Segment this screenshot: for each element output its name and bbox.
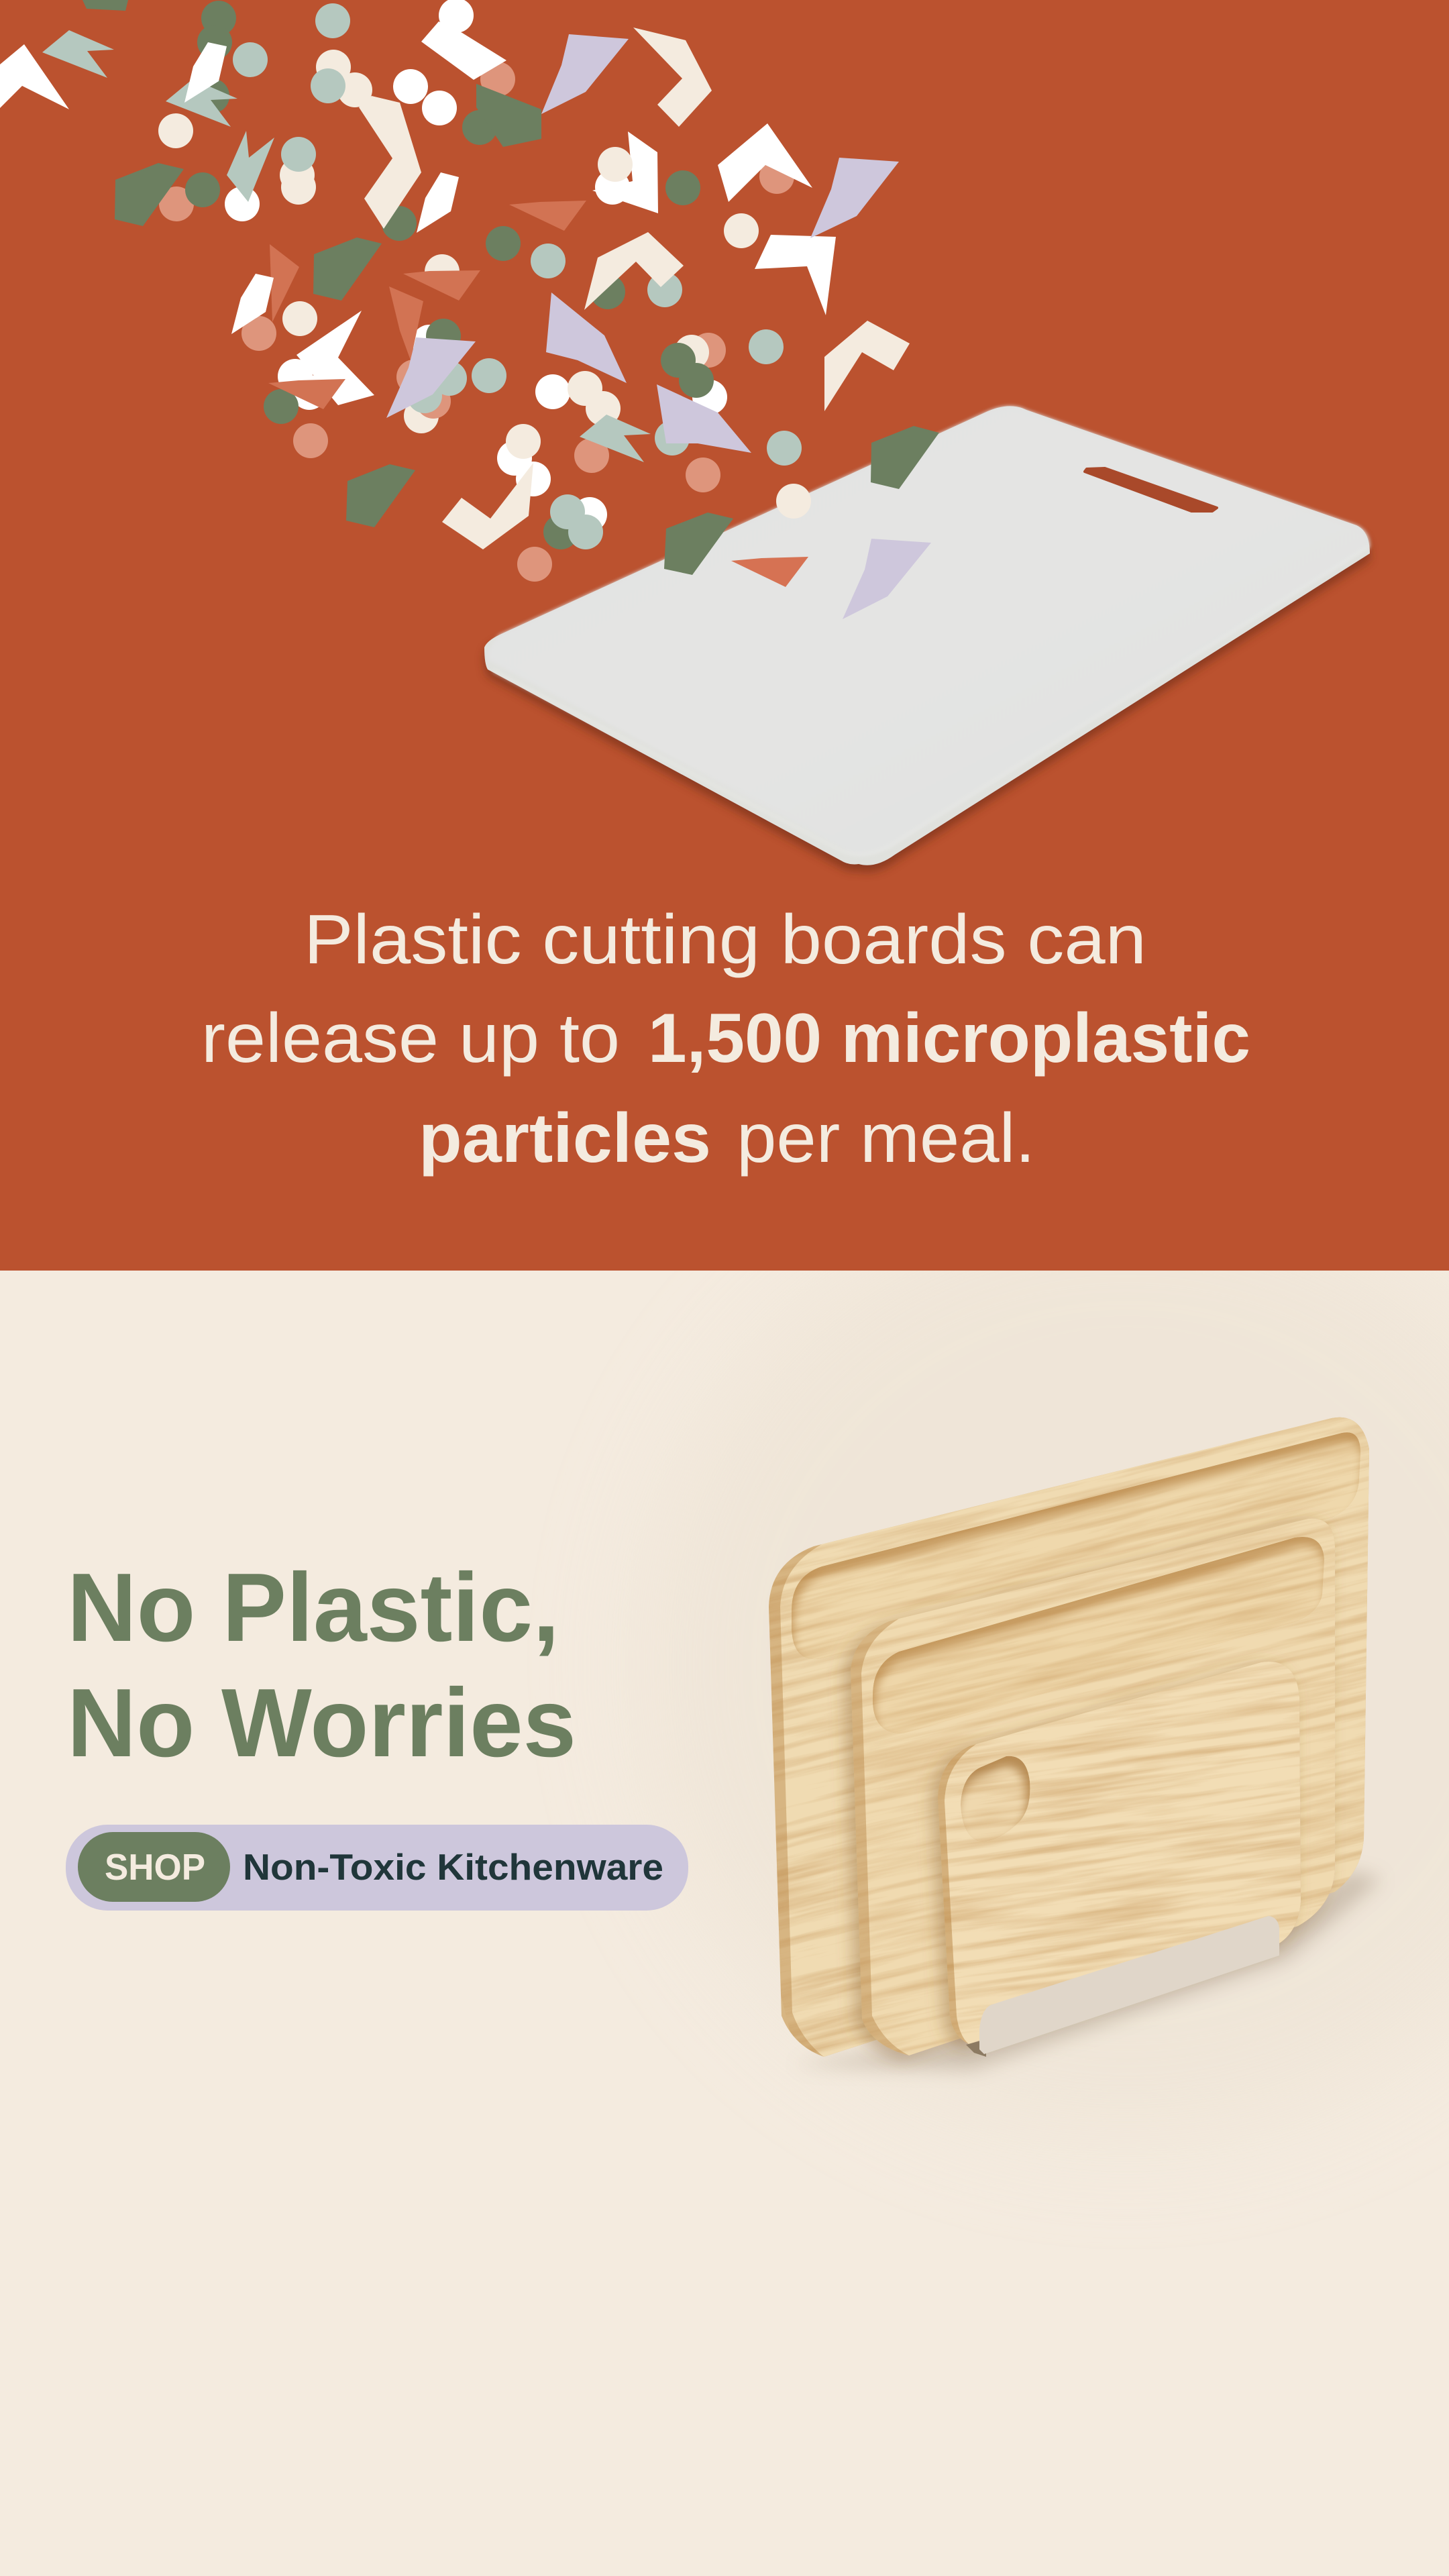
- board stand: [966, 1916, 1279, 2057]
- panel: no plastic call to action: [66, 1417, 1391, 2082]
- statistic text: per meal.: [737, 1099, 1035, 1177]
- statistic text: release up to: [201, 1000, 620, 1077]
- shop button: Non-Toxic Kitchenware: [243, 1846, 663, 1888]
- particle circles: [158, 0, 811, 582]
- statistic text: [201, 901, 1250, 1177]
- heading: [67, 1553, 576, 1777]
- plastic cutting board: [484, 406, 1370, 872]
- medium board: [835, 1515, 1338, 2068]
- statistic text: 1,500 microplastic: [648, 1000, 1250, 1077]
- statistic text: particles: [419, 1099, 711, 1177]
- wooden cutting boards set: [769, 1417, 1379, 2077]
- panel: microplastics statistic: [0, 0, 1449, 1271]
- heading: No Worries: [67, 1668, 576, 1777]
- heading: No Plastic,: [67, 1553, 559, 1662]
- small board: [922, 1657, 1303, 2055]
- large board: [769, 1417, 1369, 2057]
- statistic text: Plastic cutting boards can: [304, 901, 1146, 979]
- board handle slot: [1085, 468, 1217, 511]
- microplastic particles cloud: [0, 0, 939, 619]
- particle shapes: [0, 0, 939, 619]
- shop button: [66, 1825, 688, 1911]
- shop button: SHOP: [105, 1846, 205, 1888]
